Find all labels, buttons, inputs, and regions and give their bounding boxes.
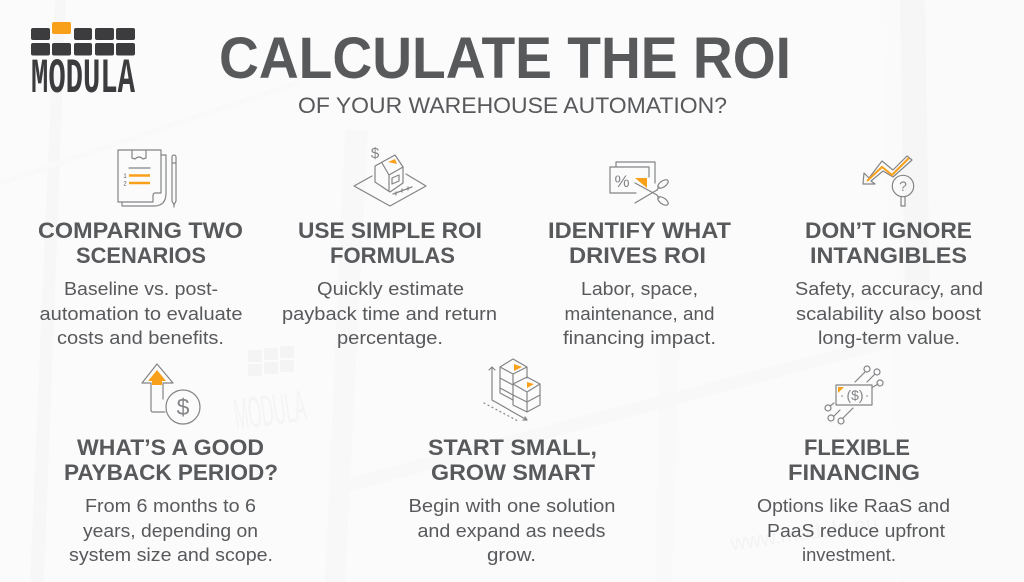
icon: clipboard checklist: 2 xyxy=(123,182,127,188)
text block: grow. xyxy=(487,544,536,565)
text block: financing impact. xyxy=(563,327,716,348)
heading xyxy=(548,218,732,268)
heading: GROW SMART xyxy=(431,460,596,485)
text block: system size and scope. xyxy=(69,544,273,565)
heading: FINANCING xyxy=(788,460,920,485)
text block xyxy=(757,495,950,565)
text block xyxy=(40,278,242,348)
heading: DRIVES ROI xyxy=(569,243,706,268)
icon: scissors cutting percent coupon xyxy=(610,162,670,207)
heading: IDENTIFY WHAT xyxy=(548,218,732,243)
icon: up arrow with dollar coin: $ xyxy=(177,394,190,420)
heading xyxy=(788,435,920,485)
panel: use simple ROI formulas xyxy=(282,145,497,348)
text block xyxy=(408,495,616,565)
text block: and expand as needs xyxy=(418,520,606,541)
heading: USE SIMPLE ROI xyxy=(298,218,482,243)
text block: Safety, accuracy, and xyxy=(795,278,983,299)
icon: banknote circuit xyxy=(825,366,883,424)
heading: FLEXIBLE xyxy=(804,435,910,460)
text block: Options like RaaS and xyxy=(757,495,950,516)
panel: flexible financing xyxy=(757,366,950,565)
heading: SCENARIOS xyxy=(76,243,206,268)
logo: Modula: MODULA xyxy=(31,51,135,107)
subtitle: OF YOUR WAREHOUSE AUTOMATION? xyxy=(298,93,727,118)
text block: Baseline vs. post- xyxy=(64,278,218,299)
title: CALCULATE THE ROI xyxy=(219,26,791,91)
text block: Labor, space, xyxy=(581,278,698,299)
icon: banknote circuit: ($) xyxy=(846,387,864,403)
text block: PaaS reduce upfront xyxy=(767,520,945,541)
text block: automation to evaluate xyxy=(40,303,242,324)
text block xyxy=(282,278,497,348)
heading: FORMULAS xyxy=(330,243,455,268)
text block: maintenance, and xyxy=(564,303,714,324)
heading: PAYBACK PERIOD? xyxy=(64,460,278,485)
icon: house on plot with dollar sign: $ xyxy=(371,145,380,162)
text block: years, depending on xyxy=(83,520,258,541)
heading: DON’T IGNORE xyxy=(805,218,972,243)
text block: costs and benefits. xyxy=(57,327,224,348)
logo: Modula xyxy=(31,22,135,107)
panel: what's a good payback period xyxy=(64,364,278,565)
icon: falling arrow with question mark magnifier xyxy=(863,156,914,206)
panel: start small, grow smart xyxy=(408,359,616,565)
text block: From 6 months to 6 xyxy=(85,495,256,516)
heading: INTANGIBLES xyxy=(810,243,967,268)
text block: payback time and return xyxy=(282,303,497,324)
heading: COMPARING TWO xyxy=(38,218,243,243)
text block: Begin with one solution xyxy=(408,495,616,516)
text block xyxy=(69,495,273,565)
heading xyxy=(428,435,597,485)
text block xyxy=(563,278,716,348)
heading: WHAT’S A GOOD xyxy=(77,435,264,460)
text block xyxy=(795,278,983,348)
text block: scalability also boost xyxy=(796,303,981,324)
text block: investment. xyxy=(802,544,896,565)
heading xyxy=(805,218,972,268)
heading: START SMALL, xyxy=(428,435,597,460)
icon: stacked growing boxes xyxy=(484,359,540,421)
text block: percentage. xyxy=(337,327,443,348)
text: www.modula.eu xyxy=(728,512,879,555)
heading xyxy=(38,218,243,268)
icon: house on plot with dollar sign xyxy=(354,145,426,206)
panel: identify what drives ROI xyxy=(548,162,732,348)
panel: don't ignore intangibles xyxy=(795,156,983,348)
text: MODULA xyxy=(231,381,309,440)
panel: comparing two scenarios xyxy=(38,150,243,348)
icon: clipboard checklist: 1 xyxy=(123,174,127,180)
text block: long-term value. xyxy=(818,327,960,348)
icon: up arrow with dollar coin xyxy=(142,364,200,424)
heading xyxy=(298,218,482,268)
icon: clipboard checklist xyxy=(118,150,176,207)
heading xyxy=(64,435,278,485)
text block: Quickly estimate xyxy=(317,278,464,299)
icon: falling arrow with question mark magnifier: ? xyxy=(899,178,907,194)
icon: scissors cutting percent coupon: % xyxy=(614,172,630,191)
